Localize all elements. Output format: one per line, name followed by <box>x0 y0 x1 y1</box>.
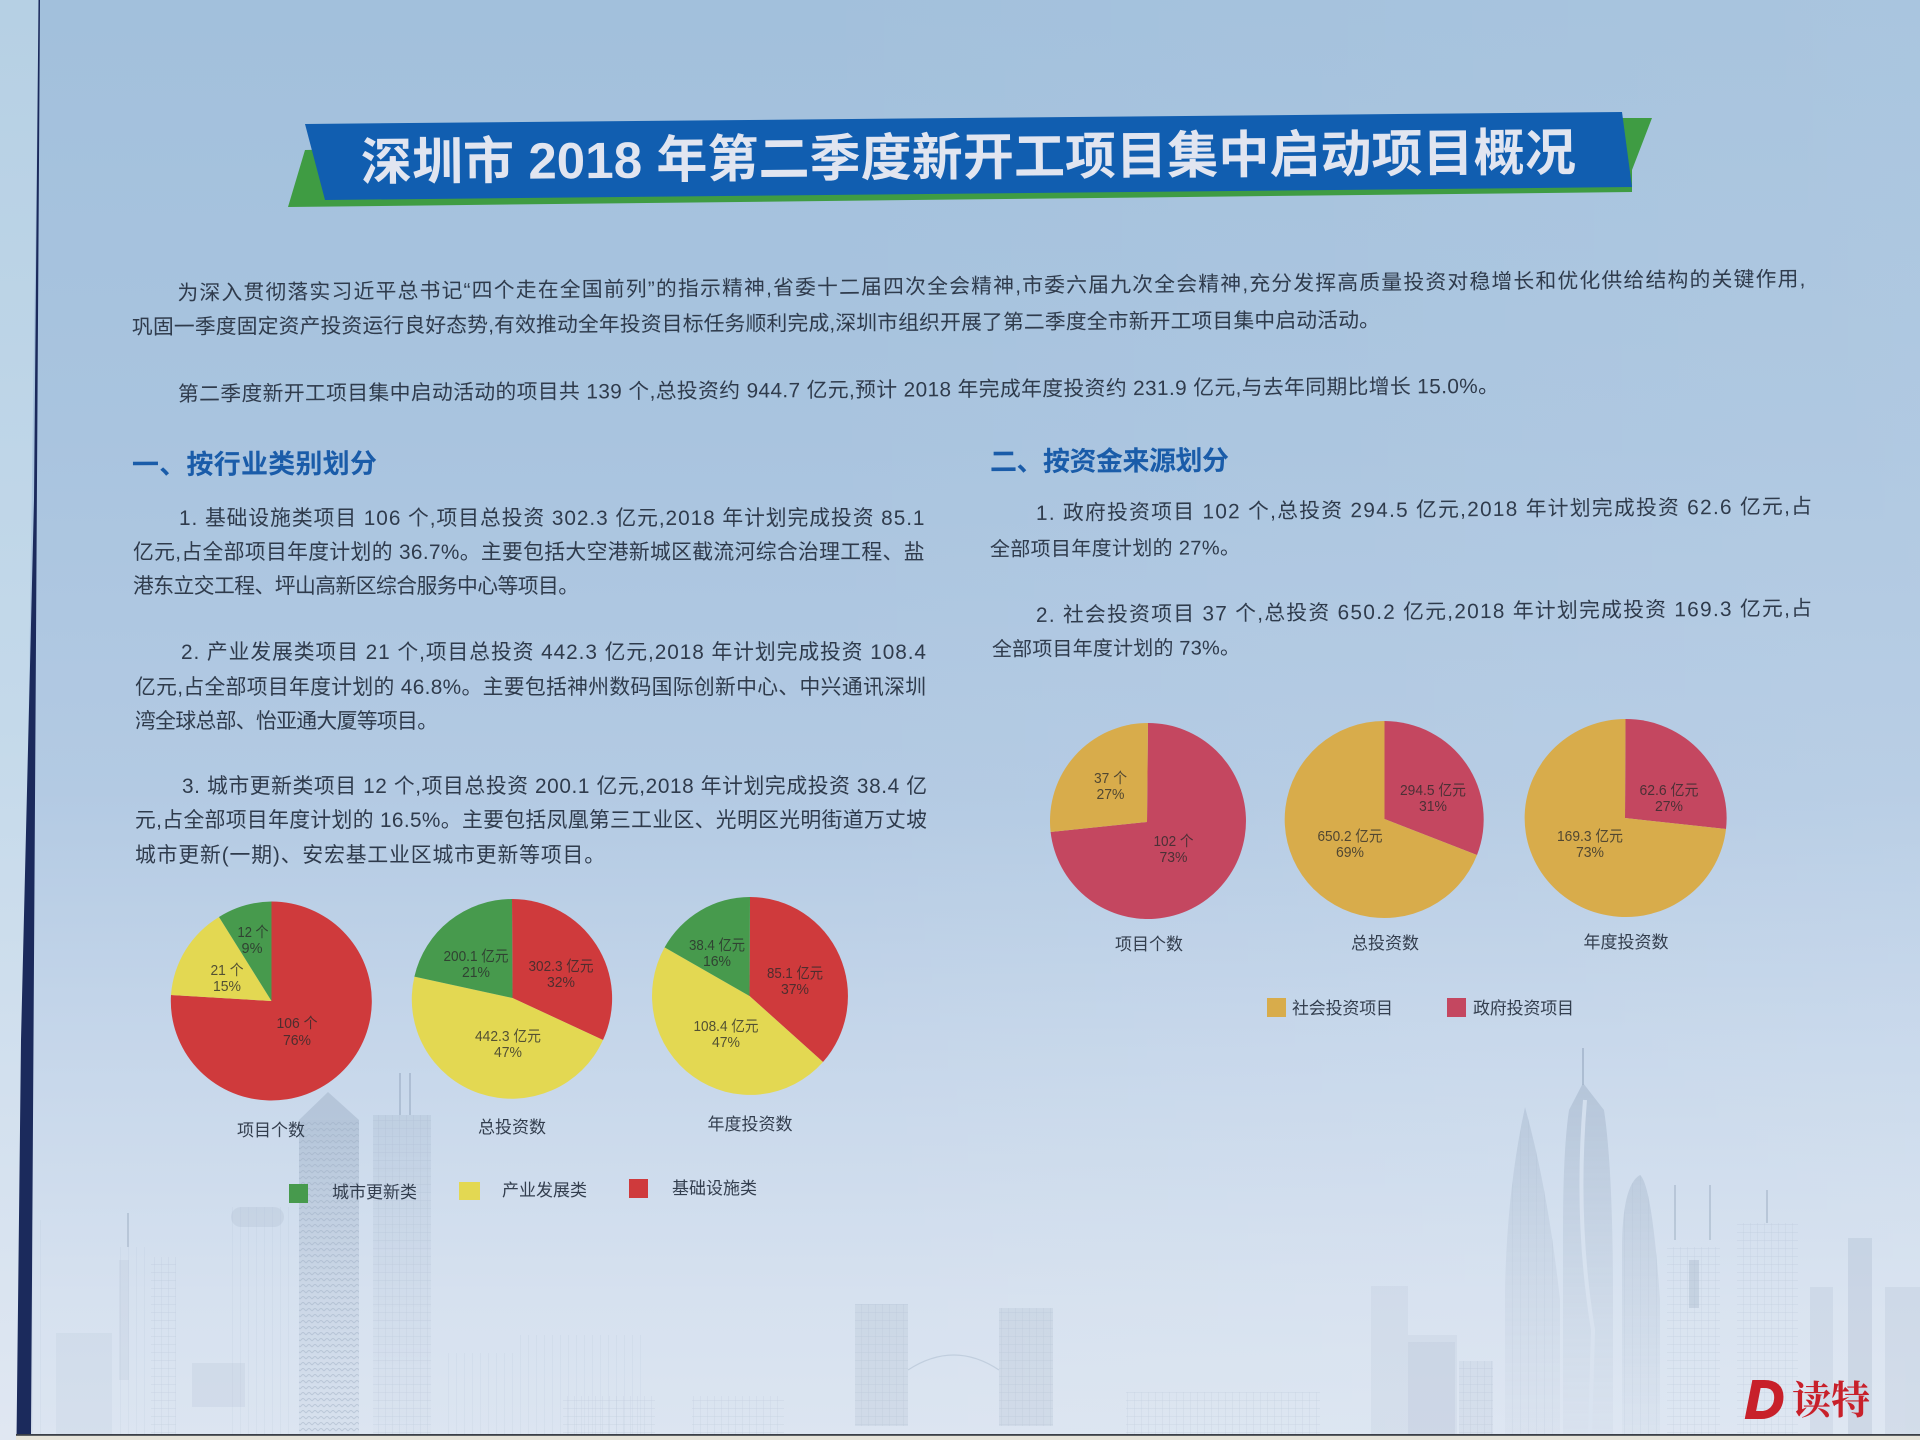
pie chart: total investment by source: 69% <box>1336 844 1364 861</box>
pie chart: total investment by industry: 47% <box>494 1044 522 1061</box>
pie chart: annual investment by industry: 38.4 亿元 <box>689 937 745 954</box>
middle skyline <box>441 1286 1493 1435</box>
text block: industry items: 城市更新(一期)、安宏基工业区城市更新等项目。 <box>135 844 605 867</box>
text block: industry items: 2. 产业发展类项目 21 个,项目总投资 442.3 亿元,2018 年计划完成投资 108.4 <box>181 641 926 664</box>
text block: industry items: 湾全球总部、怡亚通大厦等项目。 <box>135 710 438 733</box>
skyline illustration <box>32 1048 1920 1435</box>
legend: industry: 城市更新类 <box>332 1183 417 1202</box>
watermark logo: 读特 <box>1792 1370 1870 1426</box>
pie chart: project count by industry: 21 个 <box>210 962 244 979</box>
intro text: 为深入贯彻落实习近平总书记“四个走在全国前列”的指示精神,省委十二届四次全会精神,市委六届九次全会精神,充分发挥高质量投资对稳增长和优化供给结构的关键作用, <box>177 268 1805 305</box>
legend: industry: 产业发展类 <box>502 1181 587 1200</box>
text block: industry items <box>133 507 927 867</box>
text block: industry items: 1. 基础设施类项目 106 个,项目总投资 302.3 亿元,2018 年计划完成投资 85.1 <box>179 507 924 530</box>
legend: industry: 基础设施类 <box>672 1179 757 1198</box>
pie chart: total investment by industry: 总投资数 <box>478 1118 546 1137</box>
pie chart: project count by industry: 9% <box>242 940 262 957</box>
pie chart: annual investment by source <box>1525 719 1727 952</box>
pie chart: project count by source: 102 个 <box>1154 833 1194 850</box>
right skyline <box>1408 1048 1920 1435</box>
pie chart: project count by source: 27% <box>1096 786 1124 803</box>
pie chart: annual investment by source: 27% <box>1655 798 1683 815</box>
intro text <box>132 268 1805 406</box>
legend: funding source: 社会投资项目 <box>1292 999 1393 1018</box>
banner green ribbon <box>288 118 1652 207</box>
watermark logo <box>1745 1370 1870 1430</box>
text block: funding items: 全部项目年度计划的 27%。 <box>990 536 1240 561</box>
pie chart: annual investment by source: 年度投资数 <box>1584 933 1668 952</box>
pie chart: annual investment by industry: 37% <box>781 981 809 998</box>
pie chart: total investment by source: 总投资数 <box>1351 934 1419 953</box>
text block: funding items <box>990 495 1812 661</box>
pie chart: annual investment by industry: 108.4 亿元 <box>694 1018 758 1035</box>
pie chart: project count by source: 项目个数 <box>1115 935 1183 954</box>
panel: by funding source <box>990 446 1812 1018</box>
pie chart: total investment by industry: 32% <box>547 974 575 991</box>
title banner <box>288 112 1652 207</box>
text block: industry items: 亿元,占全部项目年度计划的 36.7%。主要包括大空港新城区截流河综合治理工程、盐 <box>133 541 924 564</box>
pie chart: annual investment by industry: 85.1 亿元 <box>767 965 823 982</box>
pie chart: total investment by source <box>1285 721 1484 953</box>
pie chart: project count by industry: 106 个 <box>276 1015 318 1032</box>
pie chart: total investment by industry: 200.1 亿元 <box>444 948 508 965</box>
text block: industry items: 亿元,占全部项目年度计划的 46.8%。主要包括神州数码国际创新中心、中兴通讯深圳 <box>135 676 926 699</box>
pie chart: total investment by industry: 21% <box>462 964 490 981</box>
pie chart: project count by source: 73% <box>1160 849 1188 866</box>
pie chart: annual investment by industry: 年度投资数 <box>708 1115 792 1134</box>
pie chart: project count by source <box>1050 723 1246 954</box>
text block: industry items: 3. 城市更新类项目 12 个,项目总投资 200.1 亿元,2018 年计划完成投资 38.4 亿 <box>182 775 927 798</box>
pie chart: annual investment by source: 169.3 亿元 <box>1557 828 1623 845</box>
pie chart: total investment by industry: 442.3 亿元 <box>475 1028 541 1045</box>
pie chart: annual investment by source: 73% <box>1576 844 1604 861</box>
pie chart: project count by industry <box>171 902 372 1140</box>
pie chart: project count by industry: 76% <box>283 1032 311 1049</box>
heading: by industry: 一、按行业类别划分 <box>132 449 377 480</box>
pie chart: annual investment by industry: 47% <box>712 1034 740 1051</box>
pie chart: annual investment by source: 62.6 亿元 <box>1640 782 1698 799</box>
pie chart: total investment by source: 294.5 亿元 <box>1400 782 1466 799</box>
pie chart: annual investment by industry: 16% <box>703 953 731 970</box>
pie chart: total investment by industry: 302.3 亿元 <box>528 958 594 975</box>
pie chart: total investment by industry <box>412 899 612 1137</box>
legend: funding source <box>1267 998 1574 1018</box>
left side panel <box>0 0 39 1440</box>
legend: funding source: 政府投资项目 <box>1473 999 1574 1018</box>
pie chart: project count by industry: 15% <box>213 978 241 995</box>
left skyline <box>32 1073 431 1435</box>
text block: industry items: 港东立交工程、坪山高新区综合服务中心等项目。 <box>133 575 579 598</box>
legend: industry <box>289 1179 757 1203</box>
text block: funding items: 1. 政府投资项目 102 个,总投资 294.5 亿元,2018 年计划完成投资 62.6 亿元,占 <box>1036 495 1812 525</box>
text block: funding items: 全部项目年度计划的 73%。 <box>992 636 1240 661</box>
pie chart: total investment by source: 650.2 亿元 <box>1318 828 1382 845</box>
bottom edge <box>16 1434 1920 1440</box>
board edge <box>16 0 40 1440</box>
watermark logo: D <box>1745 1370 1784 1430</box>
pie chart: project count by source: 37 个 <box>1094 770 1127 787</box>
pie chart: project count by industry: 12 个 <box>238 924 268 941</box>
banner blue ribbon <box>305 112 1632 200</box>
pie chart: annual investment by industry <box>652 897 848 1134</box>
panel: by industry <box>132 449 927 1203</box>
text block: funding items: 2. 社会投资项目 37 个,总投资 650.2 亿元,2018 年计划完成投资 169.3 亿元,占 <box>1036 597 1812 627</box>
pie chart: project count by industry: 项目个数 <box>237 1121 305 1140</box>
intro text: 巩固一季度固定资产投资运行良好态势,有效推动全年投资目标任务顺利完成,深圳市组织开展了第二季度全市新开工项目集中启动活动。 <box>132 309 1380 339</box>
intro text: 第二季度新开工项目集中启动活动的项目共 139 个,总投资约 944.7 亿元,预计 2018 年完成年度投资约 231.9 亿元,与去年同期比增长 15.0%。 <box>178 375 1499 406</box>
pie chart: total investment by source: 31% <box>1419 798 1447 815</box>
text block: industry items: 元,占全部项目年度计划的 16.5%。主要包括凤凰第三工业区、光明区光明街道万丈坡 <box>135 809 927 832</box>
heading: by funding source: 二、按资金来源划分 <box>990 446 1229 477</box>
title text: 深圳市 2018 年第二季度新开工项目集中启动项目概况 <box>361 124 1576 191</box>
